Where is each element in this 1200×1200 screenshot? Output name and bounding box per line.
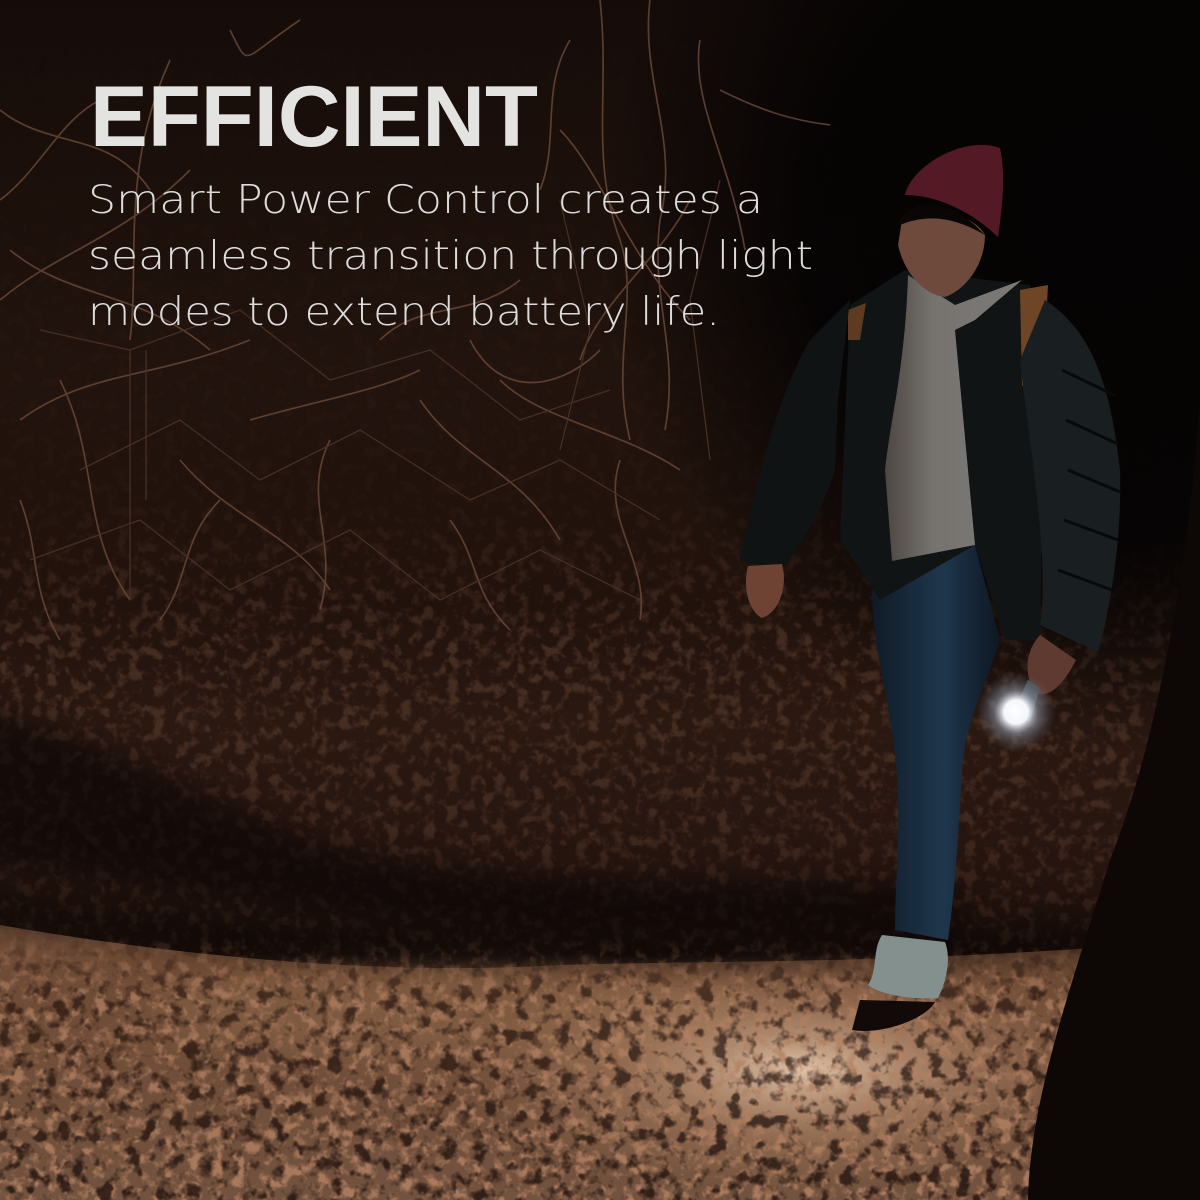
hiker <box>740 145 1120 1031</box>
red beanie <box>905 145 1003 237</box>
backpack strap <box>1020 285 1048 400</box>
darkness behind the hiker <box>500 0 1200 760</box>
shadow under the shoe <box>852 1000 935 1031</box>
shoe <box>868 935 948 998</box>
right arm <box>1020 300 1120 652</box>
left backpack strap <box>848 303 866 340</box>
body text: seamless transition through light <box>88 234 813 279</box>
body text: modes to extend battery life. <box>88 290 720 335</box>
lit ground in the foreground <box>0 925 1200 1200</box>
grey t-shirt <box>885 275 1022 561</box>
body text: Smart Power Control creates a <box>88 178 763 223</box>
left arm <box>740 300 850 572</box>
left hand <box>746 564 784 618</box>
leaf litter texture <box>0 520 1170 1200</box>
thin twigs <box>30 180 720 600</box>
body text <box>88 178 813 335</box>
shadow bands on the ground <box>0 700 1100 963</box>
dark tree trunk on the right <box>1028 400 1200 1200</box>
right hand <box>1028 635 1076 695</box>
jeans <box>872 545 1000 940</box>
hair <box>898 204 985 235</box>
neck and face <box>898 211 985 297</box>
headline: EFFICIENT <box>90 69 538 165</box>
jacket quilting <box>1058 370 1120 590</box>
flashlight glow <box>976 672 1056 752</box>
jacket body <box>840 270 1045 640</box>
bare branches in the woods <box>0 0 830 640</box>
